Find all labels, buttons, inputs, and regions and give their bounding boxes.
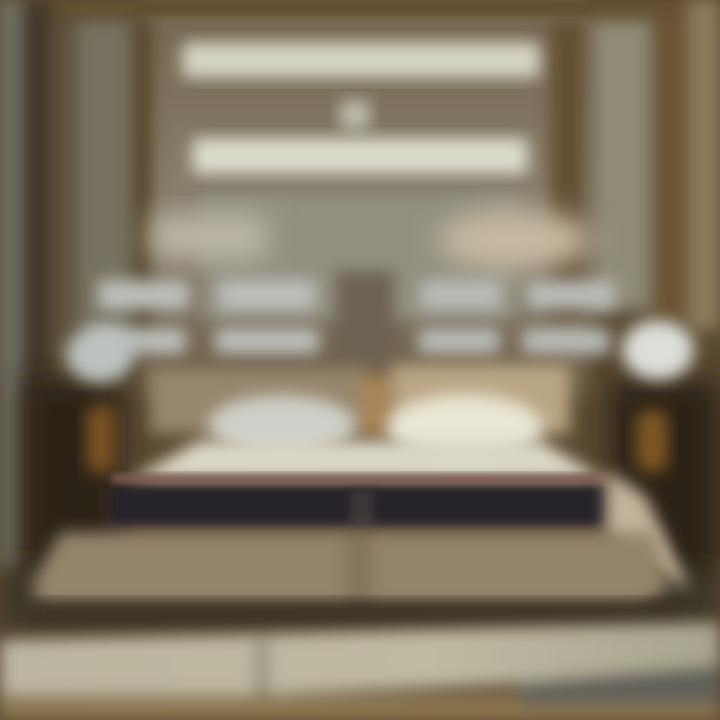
heading block: second title line bbox=[192, 138, 528, 174]
bed base bbox=[32, 530, 668, 606]
right column: subheading bbox=[437, 210, 593, 270]
foreground bench bbox=[0, 622, 720, 720]
curtains and wall stripes bbox=[0, 0, 720, 570]
right lamp bbox=[622, 320, 694, 472]
left pillow bbox=[208, 395, 356, 455]
right pillow bbox=[387, 394, 543, 462]
mattress dark band bbox=[110, 474, 606, 527]
left lamp bbox=[66, 327, 134, 473]
right column: text blocks bbox=[418, 280, 615, 354]
left column: subheading bbox=[150, 214, 268, 260]
headboard bbox=[150, 364, 570, 435]
right side blanket bbox=[606, 470, 690, 590]
left column: text blocks bbox=[92, 280, 319, 354]
heading block: first title line bbox=[182, 42, 540, 78]
base shadow bbox=[30, 602, 680, 624]
bed sheet bbox=[130, 440, 605, 480]
heading block: connector bbox=[340, 100, 370, 130]
lower wall shadows bbox=[0, 380, 720, 630]
